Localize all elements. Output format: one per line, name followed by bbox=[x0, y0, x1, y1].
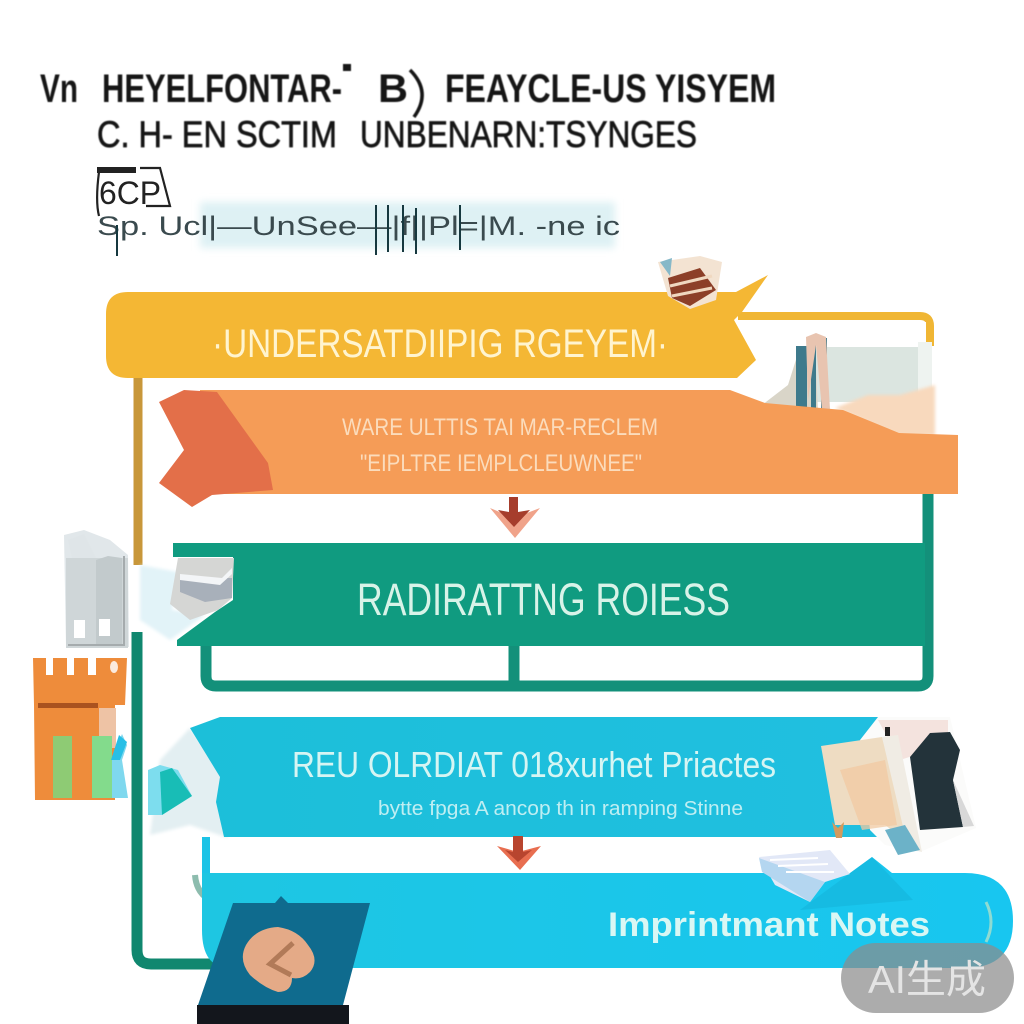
subtitle with glyph mark bbox=[97, 168, 620, 256]
title line 2: C. H- EN SCTIM bbox=[97, 114, 337, 155]
notes bracket mark bbox=[986, 902, 991, 942]
picture: person with book bbox=[821, 717, 976, 855]
teal sub-frame bbox=[206, 494, 928, 686]
banner heading: ·UNDERSATDIIPIG RGEYEM· bbox=[212, 322, 668, 366]
watermark: AI生成 bbox=[868, 959, 986, 1002]
connector column bbox=[202, 837, 210, 877]
panel: blue banner bbox=[148, 717, 882, 838]
panel: orange banner bbox=[159, 390, 958, 507]
outer frame: gold segment bbox=[138, 316, 930, 565]
outer frame: teal segment bbox=[137, 632, 215, 964]
icon: grey folder bbox=[64, 530, 129, 648]
icon: open book bbox=[759, 850, 850, 902]
arrow: blue to notes bbox=[497, 836, 541, 870]
title line 1: B bbox=[378, 67, 408, 111]
notes heading: Imprintmant Notes bbox=[608, 906, 930, 944]
orange ribbon tail bbox=[159, 390, 273, 507]
panel: teal banner bbox=[140, 494, 928, 686]
orange banner text: "EIPLTRE IEMPLCLEUWNEE" bbox=[360, 450, 642, 477]
arrow: orange to teal bbox=[490, 497, 540, 538]
title line 1: HEYELFONTAR- bbox=[102, 67, 342, 111]
icon: stack of books bbox=[140, 558, 234, 640]
picture: tools on desk bbox=[736, 322, 935, 440]
blue banner subtext: bytte fpga A ancop th in ramping Stinne bbox=[378, 798, 743, 820]
icon: tablet with hand bbox=[197, 896, 370, 1024]
icon: orange tower with bars bbox=[33, 658, 128, 800]
title line 1 bbox=[40, 64, 776, 117]
title line 2: UNBENARN:TSYNGES bbox=[360, 114, 697, 155]
subtitle mark: 6CP bbox=[99, 175, 161, 211]
orange banner text: WARE ULTTIS TAI MAR-RECLEM bbox=[342, 414, 658, 441]
watermark bbox=[841, 943, 1014, 1013]
title line 2 bbox=[97, 114, 697, 155]
hand bbox=[243, 927, 315, 992]
icon: cake badge bbox=[658, 256, 722, 309]
icon: small teal tag bbox=[148, 765, 192, 815]
title block bbox=[40, 64, 776, 155]
subtitle text: Sp. Ucl|—UnSee—|f||Pl=|M. -ne ic bbox=[97, 211, 620, 241]
title line 1: FEAYCLE-US YISYEM bbox=[445, 67, 776, 111]
orange banner text bbox=[342, 414, 658, 477]
teal banner heading: RADIRATTNG ROIESS bbox=[357, 574, 730, 625]
panel: yellow banner bbox=[106, 256, 768, 378]
blue banner heading: REU OLRDIAT 018xurhet Priactes bbox=[292, 744, 776, 785]
panel: notes pill bbox=[195, 850, 1013, 968]
subtitle mark bbox=[97, 168, 170, 216]
title line 1: Vn bbox=[40, 67, 78, 111]
device base bbox=[197, 1005, 349, 1024]
